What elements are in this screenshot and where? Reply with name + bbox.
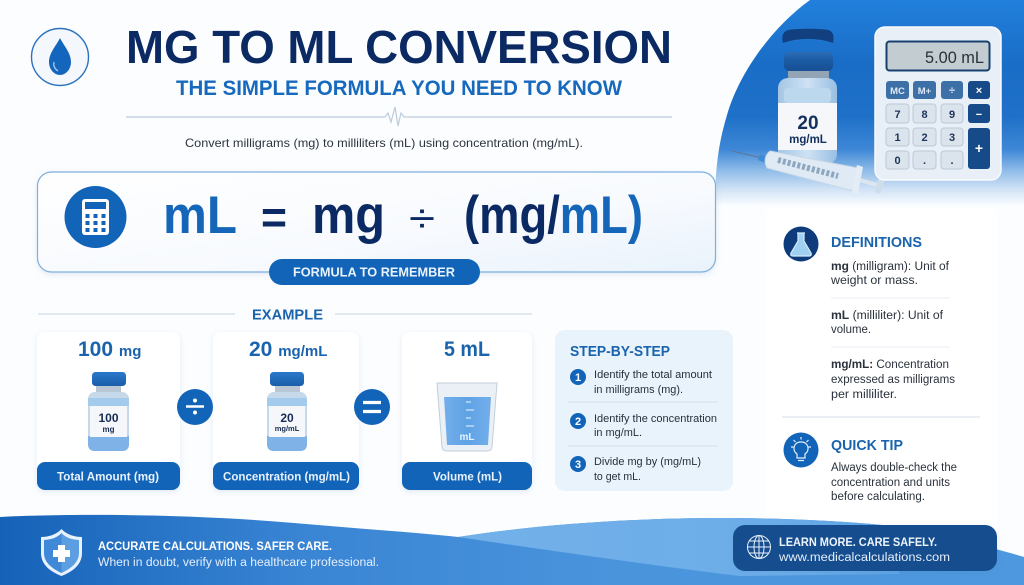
icon: vial 100 mg	[88, 372, 129, 451]
footer message: ACCURATE CALCULATIONS. SAFER CARE.	[98, 541, 332, 553]
label bar: Concentration (mg/mL)	[223, 470, 350, 484]
heading: step-by-step: STEP-BY-STEP	[570, 344, 670, 360]
card: concentration	[213, 332, 359, 490]
quick tip text: before calculating.	[831, 491, 925, 503]
definition: mL: mL (milliliter): Unit of	[831, 310, 944, 322]
label bar: Total Amount (mg)	[57, 470, 159, 484]
step 2: in mg/mL.	[594, 427, 642, 439]
calculator keys: .	[923, 155, 926, 167]
calculator keys: MC	[890, 86, 905, 97]
calculator keys: ×	[976, 85, 982, 97]
footer message: When in doubt, verify with a healthcare professional.	[98, 557, 379, 569]
step 3: 3	[575, 459, 581, 471]
calculator keys: 3	[949, 132, 955, 144]
icon: shield	[41, 529, 82, 576]
icon: divide operator	[177, 389, 213, 425]
definition: mg: weight or mass.	[830, 275, 918, 287]
icon: large vial 20 mg/mL: 20	[797, 113, 819, 134]
step 1: Identify the total amount	[594, 369, 712, 381]
definition: mg/mL: expressed as milligrams	[831, 374, 955, 386]
panel: definitions and quick tip	[765, 208, 997, 530]
step 1: in milligrams (mg).	[594, 384, 683, 396]
formula text	[163, 186, 643, 245]
definition: mg/mL	[831, 359, 955, 401]
icon: large vial 20 mg/mL	[778, 29, 837, 164]
step 2: 2	[575, 416, 581, 428]
step 1: 1	[575, 372, 581, 384]
blue corner background	[715, 0, 1024, 210]
subtitle: THE SIMPLE FORMULA YOU NEED TO KNOW	[176, 77, 622, 100]
icon: vial 100 mg: mg	[102, 425, 115, 434]
heartbeat divider	[126, 107, 672, 126]
quick tip text: Always double-check the	[831, 462, 957, 474]
icon: light bulb	[784, 432, 818, 468]
formula text: mL	[163, 186, 237, 245]
icon: vial 20 mg/mL: mg/mL	[275, 424, 300, 433]
calculator keys: 2	[921, 132, 928, 144]
definition: mg	[830, 261, 950, 287]
heading: definitions: DEFINITIONS	[831, 234, 922, 251]
label bar: Volume (mL)	[433, 470, 502, 484]
quick tip text	[831, 462, 957, 503]
calculator keys: .	[950, 155, 954, 167]
icon: equals operator	[354, 389, 390, 425]
icon: large vial 20 mg/mL: mg/mL	[789, 134, 827, 146]
definition: mL	[831, 310, 944, 336]
step 2	[570, 413, 717, 439]
value: 20 mg/mL: 20 mg/mL	[249, 338, 327, 361]
calculator display: 5.00 mL	[925, 48, 984, 67]
icon: flask	[784, 226, 818, 262]
calculator keys: +	[975, 140, 983, 156]
definition: mg/mL: mg/mL: Concentration	[831, 359, 949, 371]
calculator keys: 0	[894, 155, 901, 167]
calculator keys: ÷	[949, 85, 955, 97]
formula text: mg	[312, 186, 385, 245]
icon: water drop	[32, 28, 88, 86]
icon: vial 20 mg/mL	[267, 372, 307, 451]
calculator keys: M+	[918, 86, 932, 97]
title: MG TO ML CONVERSION	[126, 21, 672, 73]
value: 5 mL: 5 mL	[444, 338, 490, 361]
footer link pill: www.medicalcalculations.com	[778, 552, 950, 564]
formula badge	[269, 259, 480, 285]
step 3: to get mL.	[594, 471, 641, 483]
calculator keys: 9	[949, 109, 955, 121]
icon: calculator	[64, 186, 126, 248]
footer wave background	[0, 515, 1024, 585]
icon: calculator with display	[875, 27, 1001, 180]
card: total amount	[37, 332, 180, 490]
icon: vial 100 mg: 100	[98, 411, 119, 425]
quick tip text: concentration and units	[831, 477, 950, 489]
value: 100 mg: 100 mg	[78, 338, 141, 361]
formula text: (mg/mL)	[464, 186, 643, 245]
label bar	[213, 462, 359, 490]
description text: Convert milligrams (mg) to milliliters (mL) using concentration (mg/mL).	[185, 136, 583, 150]
calculator keys: −	[976, 109, 982, 121]
calculator keys: 8	[921, 109, 928, 121]
definition: mg/mL: per milliliter.	[831, 389, 897, 401]
step 2: Identify the concentration	[594, 413, 717, 425]
calculator display	[886, 42, 990, 70]
example heading: EXAMPLE	[252, 306, 323, 324]
label bar	[37, 462, 180, 490]
footer link pill: LEARN MORE. CARE SAFELY.	[779, 537, 937, 549]
definition: mg: mg (milligram): Unit of	[831, 261, 950, 273]
calculator keys: 1	[894, 132, 901, 144]
label bar	[402, 462, 532, 490]
icon: beaker: mL	[460, 432, 474, 443]
calculator keys: 7	[894, 109, 901, 121]
heading: quick tip: QUICK TIP	[831, 437, 903, 454]
calculator keys	[886, 81, 990, 169]
formula badge: FORMULA TO REMEMBER	[293, 266, 455, 280]
step 3	[570, 456, 701, 483]
definition: mL: volume.	[831, 324, 871, 336]
formula text: =	[261, 191, 287, 243]
formula text: ÷	[409, 197, 435, 241]
icon: globe	[748, 536, 770, 558]
icon: beaker	[437, 383, 497, 451]
icon: vial 20 mg/mL: 20	[280, 411, 294, 425]
footer message	[98, 541, 379, 569]
icon: syringe	[732, 151, 885, 194]
step 3: Divide mg by (mg/mL)	[594, 456, 701, 468]
footer link pill	[733, 525, 997, 571]
step 1	[570, 369, 712, 396]
card: volume	[402, 332, 532, 490]
panel: step-by-step	[555, 330, 733, 491]
panel: formula	[38, 172, 716, 285]
